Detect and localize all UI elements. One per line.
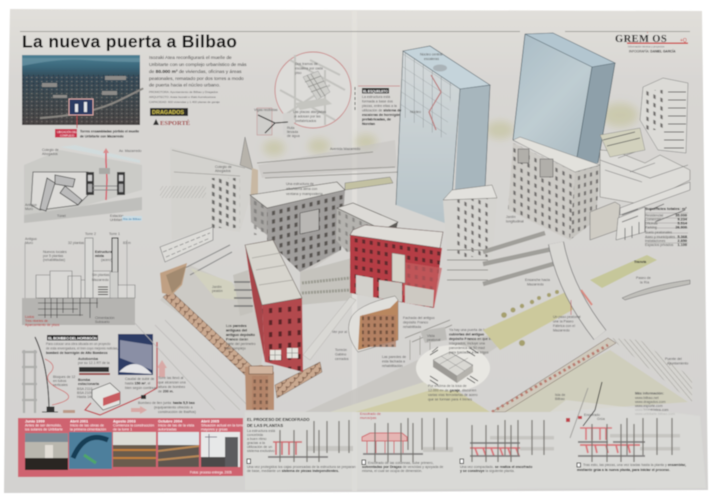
riverside promenade band	[305, 335, 500, 412]
concrete pumping diagram: BSA 2110	[77, 387, 92, 391]
bridge and ramps lower right: Bilbao	[555, 397, 565, 401]
cross-section diagram: Subsuelo	[95, 320, 110, 324]
concrete pumping diagram	[22, 334, 196, 415]
structure callout circle: piso	[295, 71, 301, 75]
low rise block and deck	[590, 150, 690, 240]
cross-section diagram: Nuevos locales	[43, 250, 67, 254]
surface table: 5.514	[677, 222, 688, 226]
2004: Inicio de las de la vista	[158, 424, 194, 428]
green esplanades: Tranvía	[634, 260, 646, 264]
concrete pumping diagram: hasta 150 m³, el	[125, 382, 151, 386]
concrete pumping diagram: BSA 2109	[77, 391, 93, 395]
formwork process panel	[245, 382, 706, 490]
beam joint detail: de agua	[287, 134, 300, 138]
photo caption: Torres ensambladas pórtido el muelle	[80, 130, 139, 134]
tower 2 glass volume	[513, 33, 615, 169]
red left building	[233, 240, 303, 372]
historic building upper left	[160, 137, 258, 240]
brick historic facade: rehabilitada	[403, 325, 421, 329]
pale green courtyard	[190, 268, 240, 300]
2004	[158, 420, 199, 467]
intro text: ARQUITECTO: Arata Isozaki e Iñaki Aurrekoetxea	[149, 95, 216, 99]
title: La nueva puerta a Bilbao	[22, 32, 237, 52]
2005	[201, 420, 244, 467]
concrete pumping diagram: que alcanzan una	[158, 380, 186, 384]
logo and credit: +Q	[680, 38, 687, 44]
bridge and ramps lower right: Ayuntamiento	[667, 362, 688, 366]
site plan: Muro	[25, 207, 33, 211]
more information box: www.esporte.com	[635, 404, 663, 408]
process heading: DE LAS PLANTAS	[247, 423, 283, 428]
wall caption: Los paredes	[226, 324, 247, 328]
cross-section diagram: Antiguo	[25, 237, 37, 241]
plaza captions: cubiertas del antiguo	[449, 332, 484, 336]
surface table: 9.234	[677, 218, 688, 222]
skeleton callout: EL ESQUELETO	[363, 89, 388, 93]
2005: Abril 2005	[201, 420, 219, 424]
cross-section diagram: Cimentación	[95, 316, 115, 320]
intro text: PROMOTORA: Ayuntamiento de Bilbao y Dragados	[149, 90, 218, 94]
concrete pumping diagram: en tubos	[53, 379, 67, 383]
step 4: Encofrado	[584, 413, 600, 417]
red central building	[350, 225, 443, 308]
wall caption: antiguas del	[226, 328, 247, 332]
site plan: Ría de Bilbao	[123, 217, 141, 221]
section text: Para colocar una obra situada en un proyecto	[46, 342, 111, 346]
beam joint detail: llevada	[287, 130, 298, 134]
wall caption: Franco darán	[226, 338, 248, 342]
logo and credit: INFOGRAFÍA: DANIEL GARCÍA	[629, 48, 676, 54]
intro text	[149, 55, 247, 104]
pump boom	[35, 337, 49, 407]
construction timeline band	[18, 418, 244, 477]
sponsor logos	[150, 108, 190, 127]
historic building upper left: Abogados	[215, 169, 231, 173]
skeleton callout: utilización de sistema de	[362, 108, 401, 112]
curved footbridge: Mazarredo	[553, 328, 570, 332]
plaza captions: para trasladar a los trigos	[449, 350, 489, 354]
long wall and roof to left	[160, 227, 232, 275]
site plan: Abogados	[42, 152, 58, 156]
brick historic facade: Las paredes de	[382, 355, 406, 359]
plaza captions: Vista	[427, 334, 435, 338]
site plan: Uribitarte	[110, 218, 124, 222]
aerial photo	[22, 55, 142, 128]
white plaza with building model	[416, 345, 490, 391]
concrete pumping diagram: EL BOMBEO DEL HORMIGÓN	[48, 335, 97, 340]
skeleton callout: Norelan	[362, 122, 375, 126]
brick historic facade: rehabilitación	[382, 364, 403, 368]
2003: de la torre 1	[113, 428, 132, 432]
structure callout circle: prefabricados	[295, 119, 316, 123]
process heading: sistema exclusivo	[247, 449, 274, 453]
2004: Octubre 2004	[158, 420, 183, 424]
small grey building behind red block	[336, 203, 398, 252]
1999	[25, 420, 68, 470]
tower 1 glass volume: Núcleo central	[420, 52, 443, 56]
wall caption: del complejo	[226, 346, 246, 350]
step 1: de base, mediante un sistema de piezas independientes.	[247, 469, 339, 473]
tower 1 glass volume	[396, 46, 490, 230]
plaza captions: varias vías ferroviarias de acero	[428, 393, 478, 397]
central green strip	[348, 383, 490, 412]
process heading: a buen ritmo	[247, 437, 267, 441]
bridge and ramps lower right: Isla de	[555, 393, 565, 397]
tower 1 glass volume: Núcleo	[410, 110, 421, 114]
logo and credit: '	[647, 32, 648, 38]
hatched grey terraces: Mazarredo	[527, 282, 544, 286]
sponsor logos: ESPORTÉ	[160, 119, 190, 127]
concrete pumping diagram: Autobomba	[78, 357, 99, 361]
infographic spread: Jardín	[212, 285, 222, 289]
site photo	[118, 334, 153, 375]
beam joint detail: Ruta	[287, 126, 294, 130]
pump truck	[92, 383, 120, 410]
brick historic facade: Ver por al	[332, 330, 347, 334]
plaza captions: que se forman para 4 trenes	[428, 398, 472, 402]
structure callout circle: Dos tramos de	[295, 62, 318, 66]
cross-section diagram: Sin plantas	[92, 273, 110, 277]
2003: Agosto 2003	[113, 420, 136, 424]
concrete pumping diagram: estacionaria	[78, 382, 100, 386]
tower 1 glass volume: escaleras	[424, 57, 439, 61]
skeleton callout	[355, 86, 401, 126]
surface table: 26.900	[675, 226, 687, 230]
site plan: Colegio de	[42, 148, 59, 152]
photo caption	[55, 129, 139, 138]
wall caption: antiguo depósito	[226, 333, 256, 337]
rail tracks behind buildings	[257, 140, 400, 190]
step 4: mediante grúa a la nueva planta, para iniciar el proceso.	[577, 468, 670, 472]
2003	[113, 420, 156, 467]
structure callout circle: Las placas alargadas	[293, 110, 326, 114]
concrete pumping diagram: Caudal de subir de	[125, 377, 154, 381]
step 1	[247, 420, 356, 473]
road lines lower left	[132, 320, 250, 410]
more information box	[635, 392, 675, 416]
surface table: Residencial	[645, 214, 663, 218]
intro text: Isozaki Atea reconfigurará el muelle de	[149, 55, 232, 61]
scaffold	[22, 350, 37, 413]
cross-section diagram: Mazarredo	[92, 278, 109, 282]
grey building centre: albañilería alma con	[286, 187, 317, 191]
cross-section diagram: (rehabilitadas)	[43, 258, 65, 262]
step 2	[360, 412, 453, 473]
structure callout circle	[275, 52, 351, 128]
concrete pumping diagram: bien según continua	[125, 386, 156, 390]
brick historic facade: cerrados	[335, 357, 349, 361]
concrete pumping diagram: por su 12.1 RT de la	[78, 361, 110, 365]
site plan: Antiguo	[25, 203, 37, 207]
2004: autorizadas	[158, 428, 177, 432]
hatched grey terraces: Ensanche hacia	[525, 278, 550, 282]
plaza captions: depósito Franco en que irá	[449, 337, 493, 341]
plaza captions: Ya hay una puerta de las	[449, 328, 488, 332]
grey building centre: ventana y mampostería	[286, 192, 323, 196]
brick historic facade: Torreón	[335, 348, 347, 352]
process heading: utilización de un	[247, 445, 272, 449]
process heading: EL PROCESO DE ENCOFRADO	[247, 417, 310, 422]
step 3: y se construye la siguiente planta.	[460, 469, 515, 473]
1999: Antes de ser demolido,	[25, 424, 62, 428]
1999: Junio 1999	[25, 420, 45, 424]
2001: Abril 2001	[70, 420, 88, 424]
step 3: Una vez compactado, se realiza el encofrado	[460, 465, 532, 469]
skeleton callout: formada a base dos	[362, 100, 393, 104]
process heading: La estructura está	[247, 429, 275, 433]
plaza captions	[420, 327, 493, 402]
brick historic facade: esta fachada a	[382, 360, 405, 364]
step 4	[566, 382, 686, 472]
skeleton callout: prefabricadas, de	[362, 118, 391, 122]
hatched grey terraces: longitudinal	[506, 220, 524, 224]
curved footbridge: une la Paseo	[553, 320, 573, 324]
bridge and ramps lower right	[490, 338, 692, 412]
cross-section diagram: (acero)	[101, 258, 112, 262]
concrete pumping diagram: verticales	[53, 383, 68, 387]
surface table: Instalaciones	[645, 239, 666, 243]
surface table: 2.850	[677, 239, 687, 243]
beam joint detail	[254, 108, 300, 138]
photo caption: COMPLEJO	[60, 134, 74, 138]
structure callout circle: escalera por cada	[295, 66, 323, 70]
step 2: Encofrado de	[360, 412, 381, 416]
hatched grey terraces	[483, 215, 560, 286]
site plan	[24, 145, 142, 223]
cross-section diagram: Torre 2	[85, 232, 96, 236]
wall caption: parte del perímetro	[226, 342, 256, 346]
cross-section diagram: Tres niveles de	[25, 319, 48, 323]
cross-section diagram: 32 plantas	[68, 241, 84, 245]
2001	[69, 420, 112, 469]
intro text: de puerta hacia el núcleo urbano.	[149, 82, 220, 88]
brick historic facade: Fachada del antiguo	[403, 316, 435, 320]
more information box: www.bilbao.net	[635, 396, 659, 400]
skeleton callout: La estructura está	[362, 95, 390, 99]
intro text: de 80.000 m² de viviendas, oficinas y áreas	[149, 69, 242, 75]
diagonal brick wall	[160, 263, 322, 410]
logo and credit: GREM OS	[615, 34, 667, 45]
cross-section diagram: mixta	[95, 254, 104, 258]
concrete pumping diagram: Hasta 140 t	[77, 395, 95, 399]
concrete pumping diagram: de esta envergadura, el tren cuyo mejores noticias,	[46, 346, 118, 350]
concrete pumping diagram: Torre las llevó al	[158, 376, 184, 380]
intro text: CAPACIDAD: 600 viviendas y 1.400 plazas de garaje	[149, 100, 220, 104]
brick historic facade: depósito Franco	[403, 320, 428, 324]
more information box: www.dragados.com	[635, 400, 666, 404]
site plan: Túnel	[57, 214, 66, 218]
intro text: Uribitarte con un complejo urbanístico de más	[149, 62, 247, 68]
plaza captions: 12.000 m² de garaje, discurren	[428, 388, 476, 392]
surface table	[645, 206, 688, 247]
grey building centre: Una estructura de	[286, 182, 314, 186]
watercolour stains	[263, 103, 638, 156]
pipeline	[85, 342, 157, 415]
hatched grey terraces: Jardín	[506, 215, 516, 219]
surface table: Comercial	[645, 218, 661, 222]
section heading	[47, 335, 98, 340]
green esplanades: Paseo de	[636, 276, 651, 280]
1999: los solares de Uribitarte	[25, 428, 63, 432]
logo and credit	[615, 32, 688, 54]
plaza captions: panorámica de 50 mad	[449, 346, 485, 350]
green esplanades: la Ría	[640, 280, 649, 284]
stepped plaza	[300, 258, 352, 305]
2003: Comienza la construcción	[113, 424, 154, 428]
2001: la primera cimentación	[70, 428, 106, 432]
concrete pumping diagram: de 200 m.	[158, 390, 174, 394]
brick historic facade: Gabino	[335, 352, 346, 356]
surface table: 5.368	[677, 235, 687, 239]
sponsor logos: DRAGADOS	[152, 110, 184, 116]
more information box: Más información:	[635, 392, 664, 396]
surface table: Oficinas	[645, 222, 658, 226]
cross-section diagram	[22, 232, 135, 327]
plaza captions: integrados, incluye una	[449, 342, 485, 346]
beam joint detail: Vigas recibidas	[254, 108, 278, 112]
structure callout circle: se adosan por las	[293, 114, 321, 118]
photo caption: UBICACIÓN DEL	[57, 129, 78, 134]
curved footbridge: Fábrica con el	[553, 324, 575, 328]
left plaza ground	[160, 265, 270, 375]
centre fold shading	[352, 11, 357, 491]
intro text: peatonales, rematado por dos torres a modo	[149, 76, 244, 82]
2001: Inicio de las obras de	[70, 424, 104, 428]
cross-section diagram: Aparcamiento de pisos	[25, 323, 60, 327]
green esplanades	[483, 255, 690, 350]
step 4: Tras esto, las piezas, una vez izadas hasta la planta y ensamblar,	[583, 463, 686, 467]
more information box: www.uribitarte.bilbao.com	[635, 412, 675, 416]
logo and credit: Información técnica y proyectos	[628, 44, 665, 48]
tower 1 podium block	[443, 185, 497, 295]
step 1: Una vez protegidos los cajas procesadas de la estructura se preparan	[247, 465, 356, 469]
more information box: www.isozakiatea.com	[635, 408, 669, 412]
construction timeline band: Fotos: proceso entrega. 2005	[190, 470, 232, 474]
process heading: gracias a la	[247, 441, 265, 445]
cross-section diagram: 83 m	[123, 241, 131, 245]
2005: mayores y grúas	[201, 428, 228, 432]
brick historic facade	[332, 296, 435, 368]
surface table: Espacios privados	[645, 243, 674, 247]
curved footbridge	[553, 243, 600, 335]
rail tracks behind buildings: Avenida Mazarredo	[330, 147, 360, 151]
surface table: Parking	[645, 226, 657, 230]
step 2: muros/pas	[360, 416, 377, 420]
pale walkway diagonal	[303, 297, 356, 360]
surface table: Superficies totales: m²	[645, 206, 687, 211]
plaza captions: Por encima de la losa de	[428, 384, 467, 388]
cross-section diagram: por 5 plantas	[43, 254, 63, 258]
concrete pumping diagram: (equipamiento ofrecido a	[154, 406, 193, 410]
grey building centre	[250, 182, 345, 277]
infographic spread: peatón	[212, 289, 223, 293]
concrete pumping diagram: construcción de Ibaiños)	[158, 410, 196, 414]
process heading: concebida	[247, 433, 263, 437]
bridge and ramps lower right: Puente del	[665, 357, 682, 361]
2005: Situación actual en la torre	[201, 424, 244, 428]
step 3	[460, 420, 554, 473]
concrete pumping diagram: Bombeo de llen junta: hasta 5,5 bas	[138, 401, 195, 405]
tall building far right	[600, 78, 688, 157]
cross-section diagram: Lodos	[25, 315, 35, 319]
photo caption: de Uribitarte con Mazarredo	[80, 134, 124, 138]
surface table: 1.100	[677, 243, 687, 247]
site plan: Av. Mazarredo	[119, 149, 141, 153]
historic building upper left: Colegio de	[215, 165, 232, 169]
skeleton callout: piezas, entre ellas a la	[362, 104, 397, 108]
surface table: Aseo y municipales	[645, 235, 675, 239]
surface table: Suelo peatonales	[645, 230, 672, 234]
cross-section diagram: Estructura	[95, 250, 112, 254]
curved footbridge: Un paso peatonal	[553, 315, 581, 319]
process heading	[247, 417, 310, 453]
step 2: misma, el cual se ocupa de dimensión.	[362, 469, 422, 473]
plaza captions: peatonal	[427, 338, 441, 342]
step 2: Encofrado de las columnas, sube primero,	[368, 461, 434, 465]
concrete pumping diagram: Bloques de 12	[53, 375, 75, 379]
tower 2 podium block	[508, 137, 600, 240]
wall caption	[226, 324, 256, 350]
step 4: Grúa	[597, 417, 605, 421]
top rule	[20, 30, 690, 32]
concrete pumping diagram: Bomba	[78, 378, 91, 382]
concrete pumping diagram: altura de bombeo	[158, 385, 185, 389]
surface table: 35.000	[675, 214, 687, 218]
cross-section diagram: Muro	[25, 241, 33, 245]
concrete pumping diagram: bombeó de hormigón de Alto Bombeos	[46, 351, 108, 355]
skeleton callout: escaleras de hormigón	[362, 113, 400, 117]
cross-section diagram: Torre 1	[109, 232, 120, 236]
step 2: solventadas por Dragas de vencidas y apoyada de	[362, 465, 443, 469]
site plan: Estación	[110, 214, 123, 218]
